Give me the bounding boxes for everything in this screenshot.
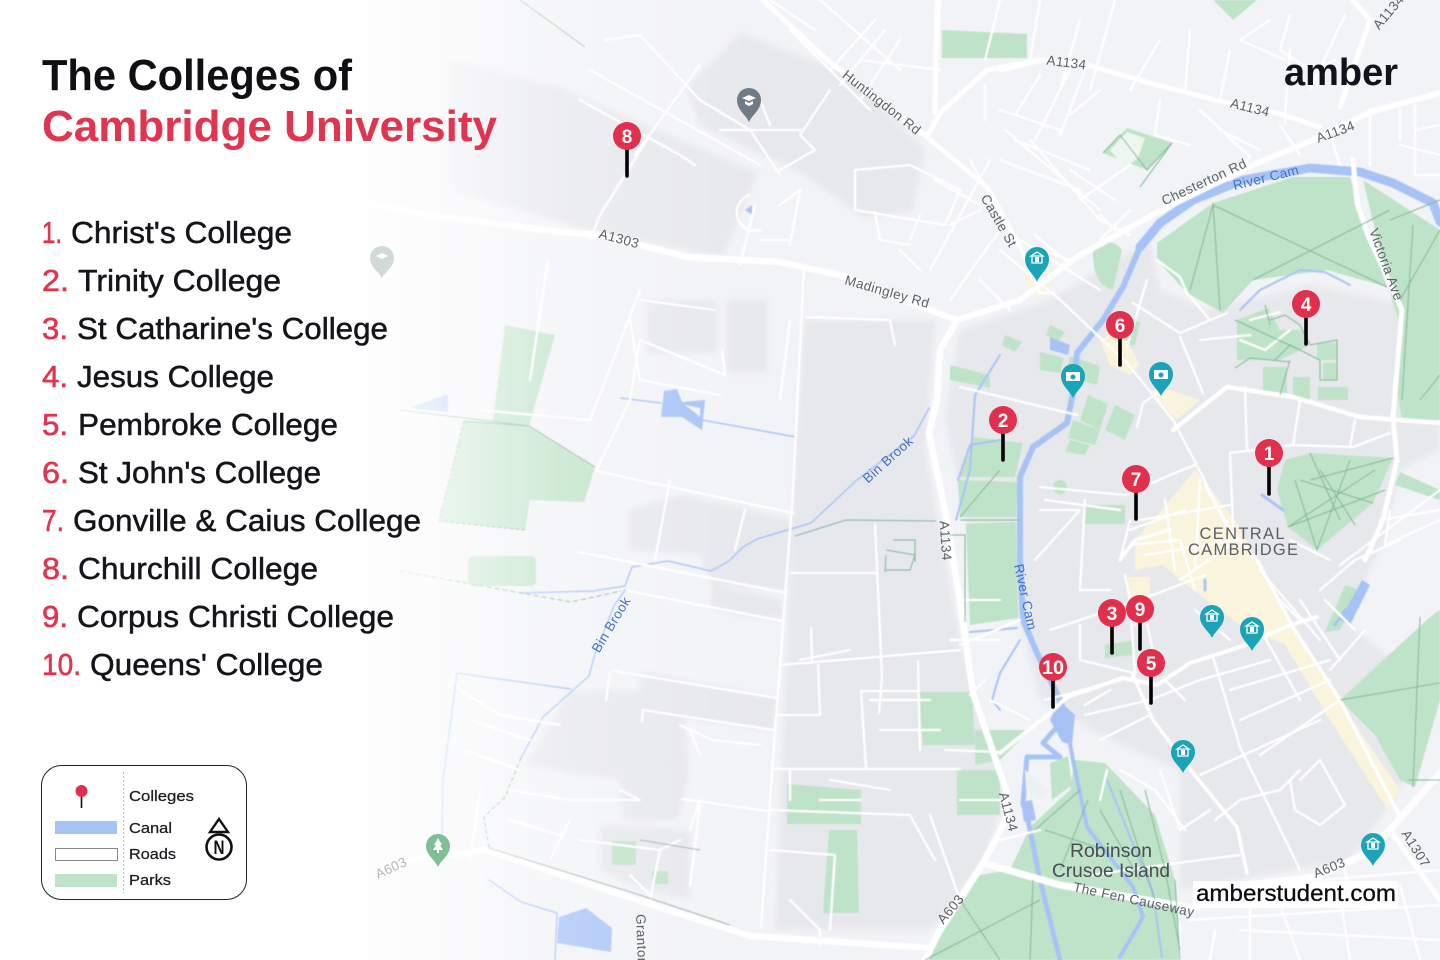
- college list: 7.: [42, 503, 64, 538]
- college list: 6.: [42, 455, 69, 490]
- map labels: Chesterton Rd: [1159, 156, 1249, 208]
- college list: 2.: [42, 263, 69, 298]
- college list: Christ's College: [71, 215, 292, 250]
- pin 9: [1126, 595, 1154, 649]
- legend: colleges pin: [76, 785, 194, 808]
- map labels: Bin Brook: [589, 594, 634, 655]
- map labels: Madingley Rd: [843, 272, 931, 311]
- icon: museum marker: [1025, 247, 1049, 282]
- legend: parks: [55, 872, 171, 889]
- college list: Pembroke College: [78, 407, 338, 442]
- college list: 1.: [42, 215, 62, 250]
- legend: roads: Roads: [129, 846, 176, 863]
- icon: park marker: [426, 834, 450, 867]
- pin 7: 7: [1131, 470, 1141, 491]
- map labels: A603: [934, 892, 967, 927]
- map labels: [373, 0, 1433, 960]
- pin 8: [613, 122, 641, 176]
- pin 4: 4: [1301, 295, 1312, 316]
- pin 2: [989, 406, 1017, 460]
- icon: north compass: [206, 819, 232, 860]
- map labels: A1134: [937, 520, 954, 561]
- pin 3: [1098, 599, 1126, 653]
- icon: museum marker lower: [1171, 740, 1195, 773]
- map labels: A603: [1311, 855, 1347, 881]
- pin 1: 1: [1264, 444, 1275, 465]
- blurred map detail: [300, 0, 1440, 960]
- college list: 4.: [42, 359, 68, 394]
- title: [42, 51, 498, 151]
- college list: Corpus Christi College: [77, 599, 394, 634]
- college list: Jesus College: [77, 359, 274, 394]
- map labels: A1134: [1229, 96, 1271, 120]
- legend: canal: Canal: [129, 820, 172, 837]
- pin 6: [1106, 311, 1134, 365]
- college list: St John's College: [78, 455, 321, 490]
- icon: north compass: N: [214, 838, 224, 859]
- pedestrian areas: [1024, 270, 1400, 810]
- title: The Colleges of: [42, 51, 352, 100]
- college list: Queens' College: [90, 647, 323, 682]
- pin 7: [1122, 465, 1150, 519]
- map labels: A1307: [1399, 827, 1433, 870]
- icon: camera marker east: [1149, 362, 1173, 396]
- park footpaths: [400, 0, 1440, 960]
- pin 4: [1292, 290, 1320, 344]
- pin 1: [1255, 439, 1283, 494]
- icon: faded school marker: [370, 246, 394, 278]
- map labels: A1134: [1046, 53, 1087, 72]
- grey built-up blocks: [450, 33, 1440, 930]
- college list: Trinity College: [78, 263, 281, 298]
- pin 8: 8: [622, 127, 632, 148]
- pin 6: 6: [1115, 316, 1125, 337]
- map labels: A1134: [996, 791, 1021, 833]
- legend: [42, 766, 246, 900]
- minor roads: [460, 0, 1440, 960]
- map labels: A1134: [1314, 118, 1357, 146]
- pin 2: 2: [998, 411, 1008, 432]
- map labels: River Cam: [1231, 162, 1300, 193]
- water: [410, 168, 1440, 960]
- map labels: Crusoe Island: [1052, 861, 1170, 882]
- map labels: Robinson: [1070, 841, 1152, 862]
- amber logo: amber: [1284, 52, 1398, 94]
- map labels: The Fen Causeway: [1072, 879, 1196, 920]
- college list: 8.: [42, 551, 69, 586]
- white fade over the left of the map: [0, 0, 760, 960]
- legend: canal: [55, 820, 172, 837]
- map point-of-interest icons: [370, 88, 1385, 867]
- map labels: A1303: [597, 226, 641, 251]
- pin 10: [1039, 653, 1067, 707]
- college list: 10.: [42, 647, 81, 682]
- map labels: A603: [373, 854, 409, 882]
- college list: Churchill College: [78, 551, 318, 586]
- title: Cambridge University: [42, 102, 498, 151]
- map labels: Bin Brook: [860, 433, 916, 486]
- parks: [439, 0, 1440, 960]
- college list: 3.: [42, 311, 68, 346]
- icon: camera marker: [1061, 364, 1085, 398]
- college list: 9.: [42, 599, 68, 634]
- website address: amberstudent.com: [1196, 880, 1396, 906]
- map labels: CENTRAL: [1200, 525, 1284, 543]
- map labels: CAMBRIDGE: [1188, 541, 1298, 559]
- pin 5: [1137, 649, 1165, 703]
- map labels: Castle St: [978, 192, 1020, 250]
- map labels: River Cam: [1011, 563, 1040, 632]
- icon: museum marker east: [1240, 617, 1264, 651]
- map labels: Huntingdon Rd: [840, 67, 924, 138]
- major roads: [300, 0, 1440, 960]
- college map pins: [613, 122, 1320, 707]
- college list: [42, 215, 421, 682]
- legend: roads: [56, 846, 176, 863]
- icon: university marker: [737, 88, 761, 122]
- legend: parks: Parks: [129, 872, 171, 889]
- pin 5: 5: [1146, 654, 1157, 675]
- college list: 5.: [42, 407, 68, 442]
- pin 3: 3: [1107, 604, 1117, 625]
- college list: St Catharine's College: [77, 311, 388, 346]
- map labels: Victoria Ave: [1366, 226, 1406, 303]
- icon: museum marker southeast: [1361, 833, 1385, 866]
- legend: colleges pin: Colleges: [129, 788, 194, 805]
- pin 10: 10: [1042, 658, 1064, 679]
- college list: Gonville & Caius College: [73, 503, 421, 538]
- icon: museum marker south: [1200, 605, 1224, 638]
- pin 9: 9: [1135, 600, 1145, 621]
